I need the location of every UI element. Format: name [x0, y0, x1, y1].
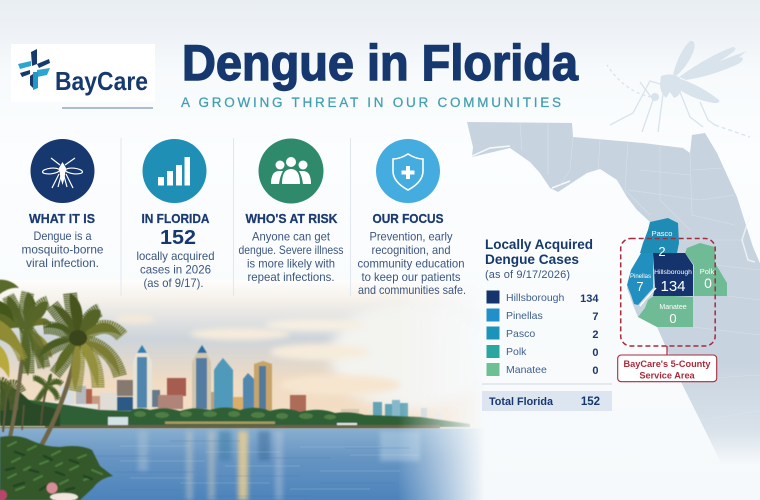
value: Pasco: 2	[658, 244, 666, 259]
legend row: Pinellas	[486, 308, 598, 323]
description: (as of 9/17).	[144, 276, 204, 290]
legend title: Locally Acquired	[485, 236, 593, 252]
icon: mosquito silhouette	[607, 41, 750, 137]
legend row: Manatee: 0	[592, 365, 598, 377]
description: repeat infections.	[248, 270, 334, 284]
service area callout	[618, 355, 717, 382]
service area callout: BayCare's 5-County	[624, 359, 711, 369]
county: Polk	[685, 243, 727, 296]
legend title	[485, 236, 593, 281]
label: Manatee: Manatee	[659, 304, 687, 311]
panel: who's at risk	[238, 138, 344, 284]
legend row: Hillsborough: 134	[580, 293, 599, 305]
description: is more likely with	[247, 256, 335, 270]
legend row: Pasco: 2	[592, 329, 598, 341]
icon: mosquito	[30, 139, 94, 203]
legend row: Manatee: Manatee	[506, 364, 547, 376]
county: Hillsborough	[653, 253, 693, 296]
small palm	[33, 374, 62, 425]
legend row: Pinellas: Pinellas	[506, 310, 543, 322]
legend row: Manatee	[486, 363, 598, 377]
description: cases in 2026	[140, 262, 211, 276]
legend total	[482, 391, 612, 411]
florida map	[467, 122, 760, 465]
background foliage	[0, 380, 60, 426]
county: Pinellas	[627, 253, 653, 305]
case count: 152	[160, 227, 196, 249]
logo	[11, 44, 155, 102]
service area callout: Service Area	[639, 370, 696, 380]
heading: IN FLORIDA	[142, 211, 210, 226]
subtitle: A GROWING THREAT IN OUR COMMUNITIES	[181, 95, 561, 110]
legend row: Polk: 0	[592, 347, 598, 359]
legend total: 152	[581, 396, 600, 408]
description: community education	[358, 256, 464, 270]
title: Dengue in Florida	[182, 35, 579, 91]
service area outline	[621, 238, 715, 346]
legend row: Pinellas: 7	[592, 311, 598, 323]
panel: what it is	[22, 139, 104, 270]
description: Anyone can get	[252, 230, 331, 244]
legend title: Dengue Cases	[485, 251, 579, 267]
heading: OUR FOCUS	[372, 211, 444, 226]
waterfront skyline photo	[0, 278, 490, 500]
flowering bush	[0, 436, 113, 500]
description: Prevention, early	[370, 230, 452, 244]
logo mark	[18, 49, 50, 90]
sky	[0, 288, 472, 428]
label: Hillsborough: Hillsborough	[654, 269, 692, 276]
clouds	[118, 309, 468, 414]
label: Pinellas: Pinellas	[630, 274, 651, 280]
label: Polk: Polk	[700, 267, 715, 276]
description	[238, 230, 344, 284]
far left fronds	[0, 280, 25, 378]
logo wordmark: BayCare	[55, 66, 148, 96]
description: locally acquired	[136, 249, 214, 263]
front palm	[38, 293, 122, 446]
tower C	[214, 358, 233, 409]
tower D	[243, 373, 254, 410]
description: to keep our patients	[362, 270, 460, 284]
tower A	[133, 345, 152, 409]
description: viral infection.	[26, 256, 99, 270]
legend total: Total Florida	[489, 396, 554, 408]
bay water	[0, 428, 490, 500]
legend row: Polk: Polk	[506, 346, 527, 358]
distant buildings	[38, 345, 441, 420]
legend row: Pasco: Pasco	[506, 328, 535, 340]
tower B	[192, 345, 211, 410]
county: Manatee	[638, 295, 693, 327]
panel: in florida	[136, 139, 214, 290]
legend row: Pasco	[486, 326, 598, 341]
palm trees	[0, 280, 122, 446]
description: Dengue is a	[34, 229, 92, 243]
description: dengue. Severe illness	[238, 243, 344, 257]
legend row: Hillsborough: Hillsborough	[506, 292, 565, 304]
shoreline trees	[0, 400, 470, 428]
water ripples	[120, 446, 420, 489]
icon: people	[258, 138, 324, 204]
value: Polk: 0	[704, 275, 712, 291]
legend title: (as of 9/17/2026)	[485, 269, 570, 281]
legend row: Hillsborough	[486, 290, 599, 305]
legend: locally acquired dengue cases	[482, 236, 612, 411]
legend row: Polk	[486, 345, 598, 359]
heading: WHAT IT IS	[29, 211, 95, 226]
description: mosquito-borne	[22, 242, 104, 256]
icon: shield	[376, 139, 440, 203]
description	[136, 249, 214, 290]
left palm	[0, 292, 52, 437]
icon: bar chart	[142, 139, 206, 203]
description	[22, 229, 104, 270]
county: Pasco	[640, 218, 679, 253]
value: Pinellas: 7	[636, 279, 644, 294]
heading: WHO'S AT RISK	[246, 211, 338, 226]
label: Pasco: Pasco	[652, 229, 672, 238]
description	[358, 230, 466, 297]
description: recognition, and	[372, 243, 450, 257]
value: Hillsborough: 134	[660, 278, 686, 295]
description: and communities safe.	[358, 283, 466, 297]
water reflections	[138, 431, 420, 500]
panel: our focus	[358, 139, 466, 297]
value: Manatee: 0	[669, 311, 677, 326]
tower E	[254, 361, 272, 412]
